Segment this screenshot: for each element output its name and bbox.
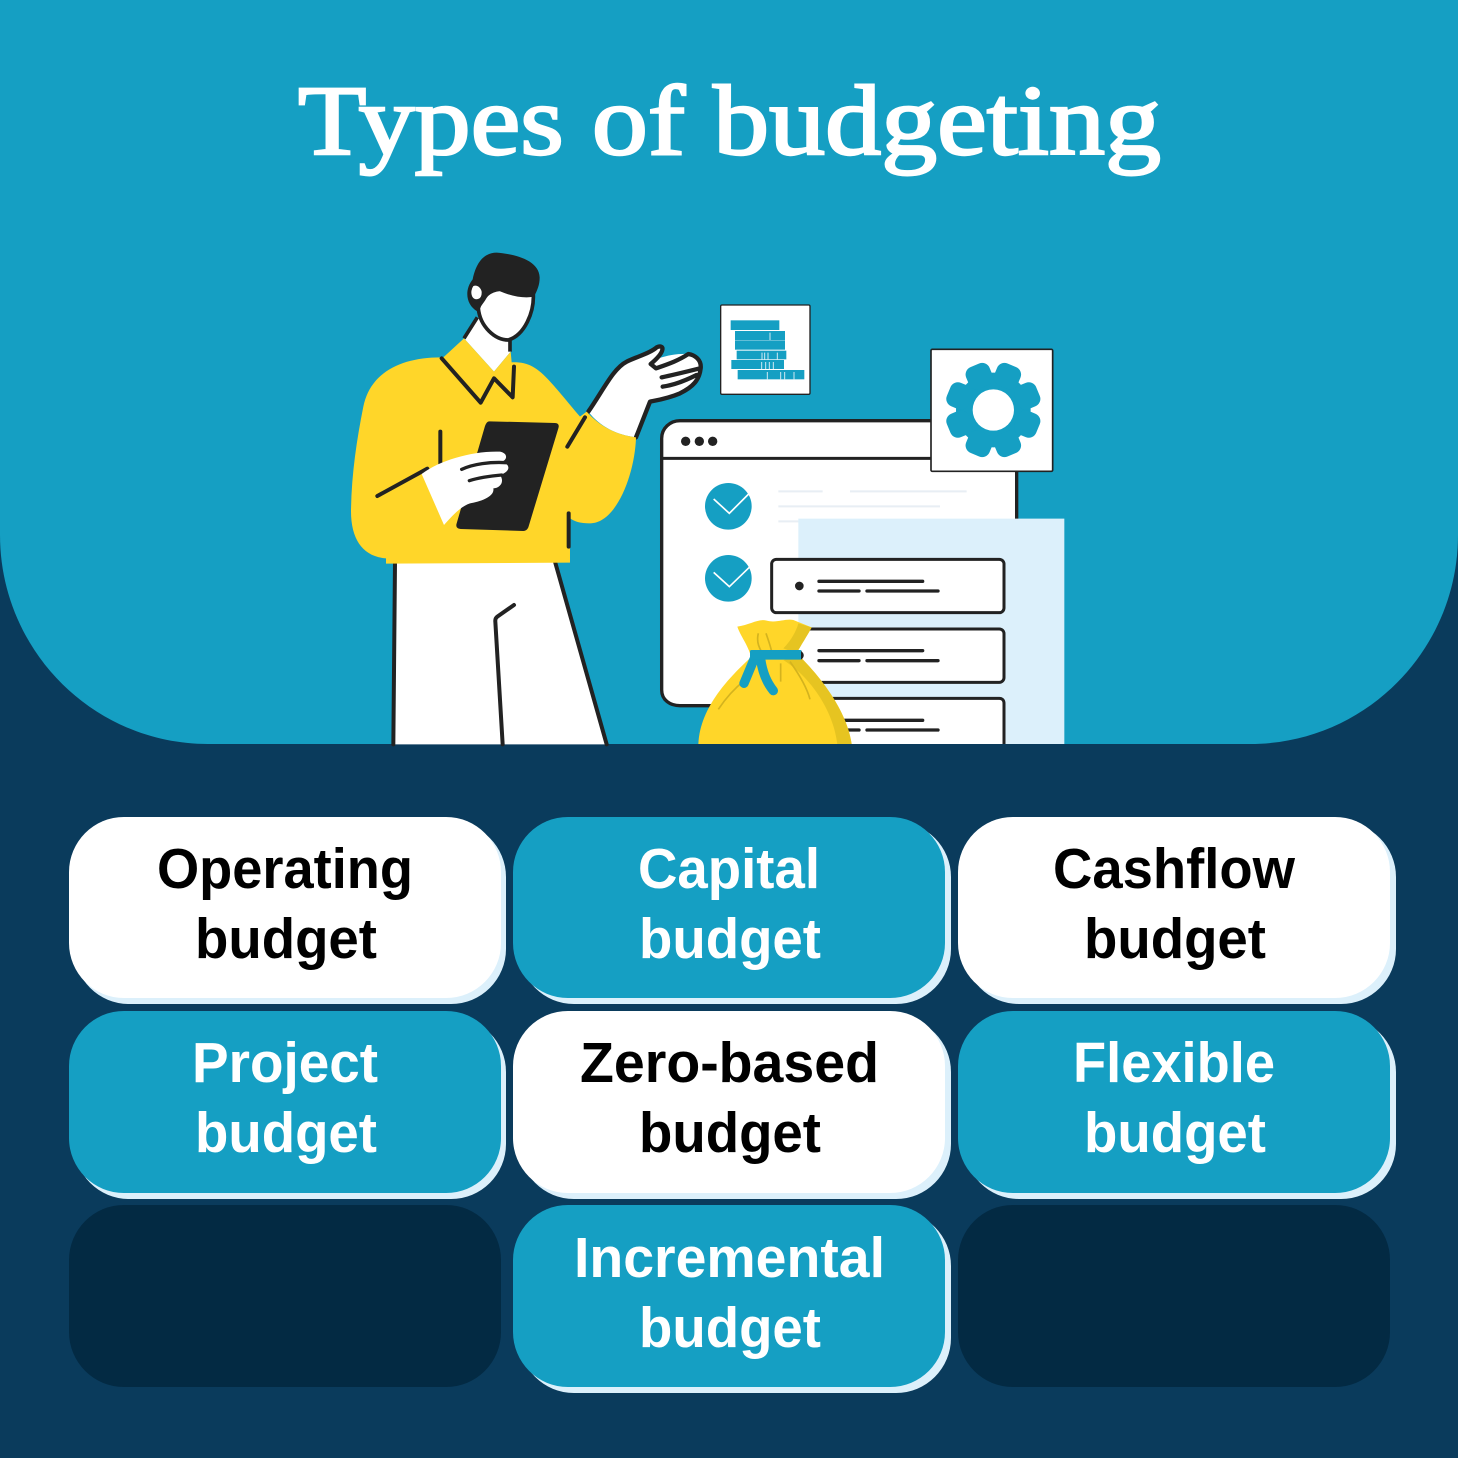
card: Cashflow budget: budget <box>1084 907 1266 971</box>
holding hand <box>422 452 508 525</box>
empty card left <box>69 1205 501 1387</box>
card: Capital budget <box>513 817 951 1004</box>
card: Flexible budget: budget <box>1084 1101 1266 1165</box>
card: Zero-based budget: budget <box>639 1101 821 1165</box>
sweater fold lines <box>377 417 585 547</box>
card: Project budget <box>69 1011 506 1199</box>
illustration: checklist window, documents, gear, money bag <box>662 305 1064 744</box>
icon: money bag <box>698 620 852 744</box>
card: Capital budget: Capital <box>638 837 820 901</box>
empty card right <box>958 1205 1390 1387</box>
tablet <box>456 421 559 531</box>
card: Incremental budget: Incremental <box>574 1226 885 1290</box>
card: Operating budget: Operating <box>157 837 413 901</box>
title: Types of budgeting <box>298 65 1161 176</box>
browser window <box>662 421 1017 706</box>
list row 1 <box>772 559 1004 613</box>
trousers <box>393 562 607 744</box>
raised hand <box>588 346 701 437</box>
neck and shirt <box>464 317 511 372</box>
card: Capital budget: budget <box>639 907 821 971</box>
card: Project budget: budget <box>195 1101 377 1165</box>
card: Flexible budget <box>958 1011 1396 1199</box>
sweater <box>351 338 636 564</box>
card: Operating budget: budget <box>195 907 377 971</box>
card: Zero-based budget: Zero-based <box>580 1031 879 1095</box>
card: Operating budget <box>69 817 506 1004</box>
card: Cashflow budget <box>958 817 1396 1004</box>
icon: gear card <box>931 349 1053 471</box>
icon: books card <box>721 305 810 394</box>
collar lines <box>442 358 514 403</box>
light blue document <box>798 519 1064 744</box>
card: Project budget: Project <box>192 1031 378 1095</box>
list row 2 <box>772 629 1004 682</box>
card: Incremental budget <box>513 1205 951 1393</box>
top panel <box>0 0 1458 744</box>
card: Flexible budget: Flexible <box>1073 1031 1275 1095</box>
card: Cashflow budget: Cashflow <box>1053 837 1296 901</box>
list row 3 <box>772 698 1004 744</box>
card: Incremental budget: budget <box>639 1296 821 1360</box>
head <box>467 253 540 340</box>
icon: check circle 2 <box>705 555 752 602</box>
icon: check circle 1 <box>705 483 752 530</box>
illustration: person with tablet <box>351 253 701 744</box>
card: Zero-based budget <box>513 1011 951 1199</box>
